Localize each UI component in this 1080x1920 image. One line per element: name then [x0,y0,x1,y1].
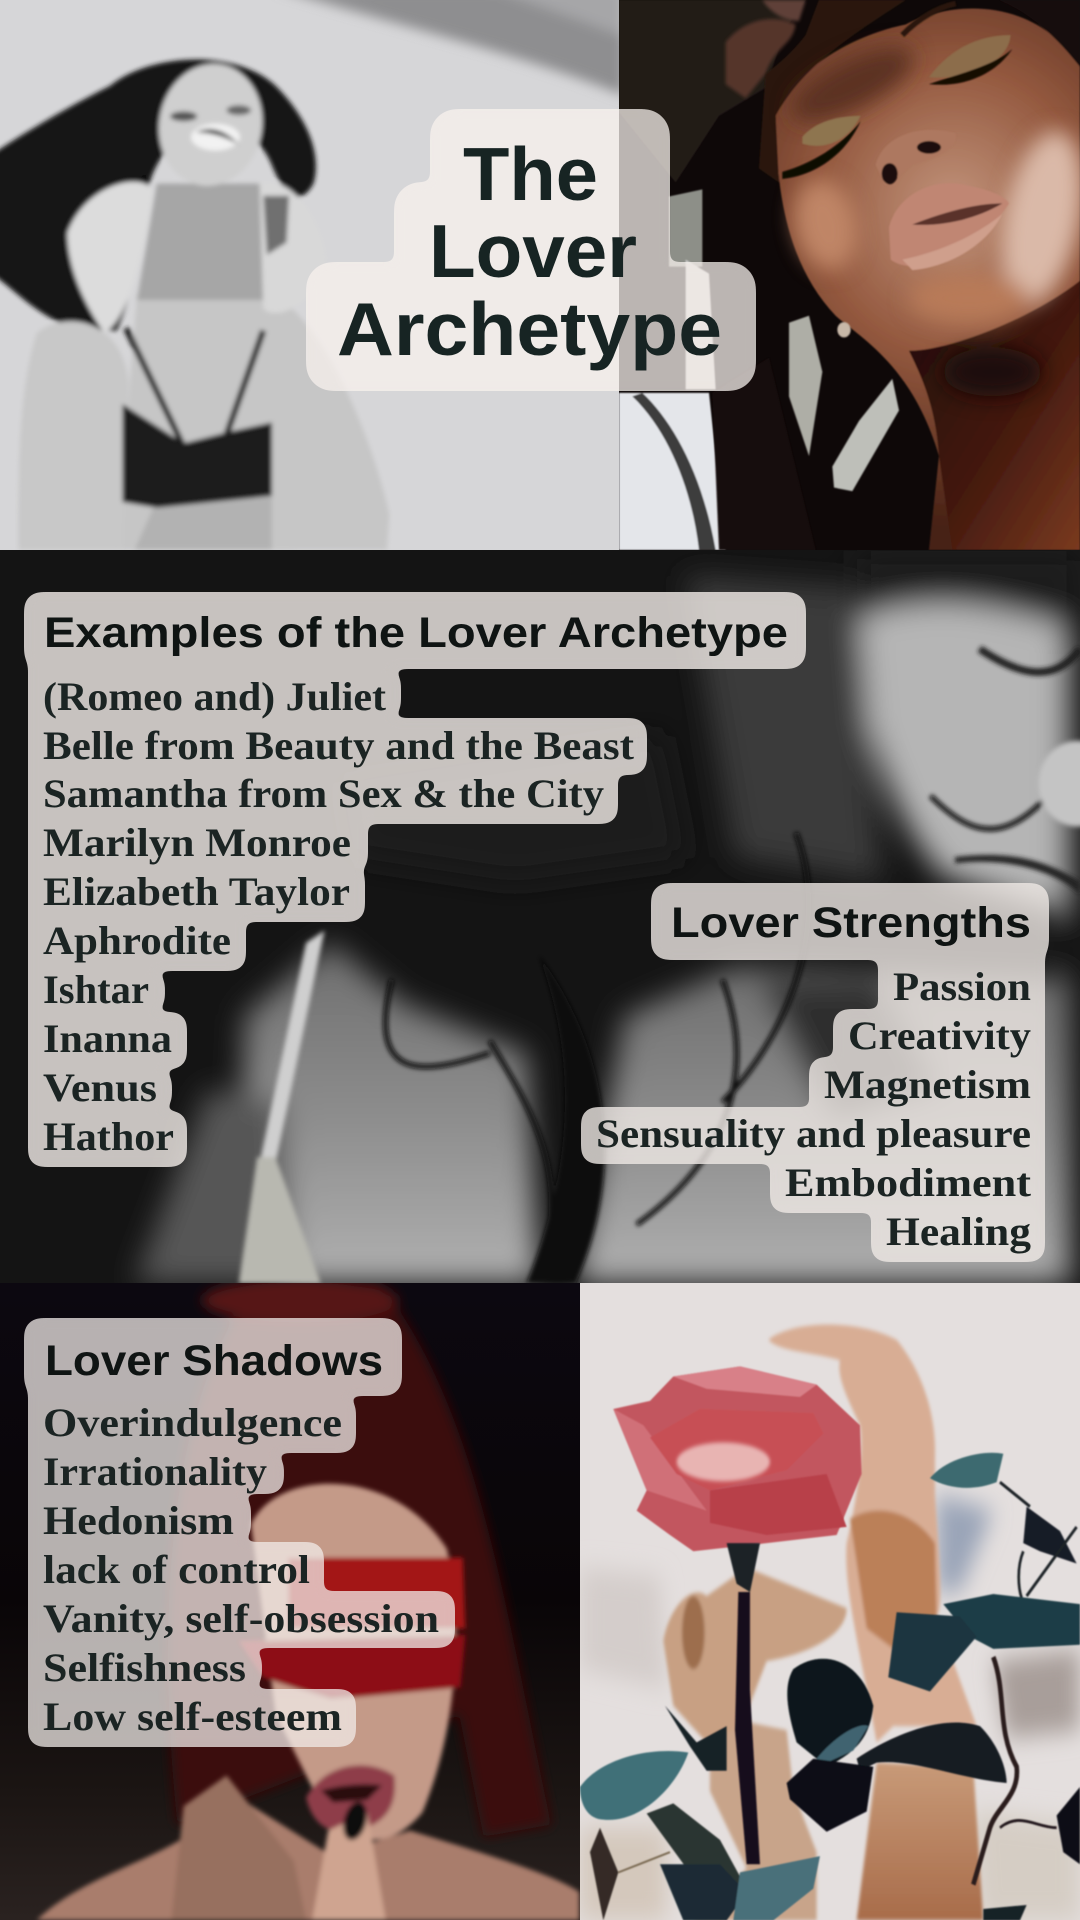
examples background [24,592,806,1167]
title background [306,109,756,391]
shadows list: Low self-esteem [43,1694,342,1739]
strengths background [581,883,1049,1262]
panel: lover strengths [581,883,1049,1262]
panel: lover shadows [24,1318,455,1747]
title: Archetype [337,287,722,371]
strengths list: Magnetism [824,1062,1031,1107]
examples list: Elizabeth Taylor [43,869,350,914]
panel: title card [306,109,756,391]
shadows list: lack of control [43,1547,310,1592]
examples list: Inanna [43,1016,172,1061]
shadows list: Hedonism [43,1498,234,1543]
strengths list: Creativity [848,1013,1031,1058]
examples list: Aphrodite [43,918,231,963]
examples heading: Examples of the Lover Archetype [44,609,788,657]
examples list: Samantha from Sex & the City [43,771,604,816]
shadows list: Irrationality [43,1449,267,1494]
title [337,132,722,371]
shadows list: Selfishness [43,1645,246,1690]
examples list: Hathor [43,1114,174,1159]
title: The [463,132,598,216]
strengths list: Sensuality and pleasure [596,1111,1031,1156]
shadows list: Vanity, self-obsession [43,1596,439,1641]
shadows list: Overindulgence [43,1400,342,1445]
strengths list: Passion [893,964,1031,1009]
strengths heading: Lover Strengths [671,899,1031,947]
examples list: (Romeo and) Juliet [43,674,387,719]
examples list: Belle from Beauty and the Beast [43,723,635,768]
shadows heading: Lover Shadows [45,1337,383,1385]
photo: laughing woman in black and white [0,0,624,550]
examples list: Ishtar [43,967,149,1012]
shadows list [43,1400,439,1739]
photo: hands holding a pink rose and ivy [580,1283,1080,1920]
photo: blindfolded woman with red hair [0,1278,580,1920]
strengths list [596,964,1032,1254]
strengths list: Embodiment [785,1160,1032,1205]
examples list: Venus [43,1065,157,1110]
title: Lover [429,209,637,293]
panel: examples of the lover archetype [24,592,806,1167]
strengths list: Healing [886,1209,1031,1254]
shadows background [24,1318,455,1747]
photo: monochrome woman with hair over shoulder [122,551,1080,1283]
photo: close-up couple portrait [619,0,1080,550]
examples list: Marilyn Monroe [43,820,351,865]
examples list [43,674,635,1159]
